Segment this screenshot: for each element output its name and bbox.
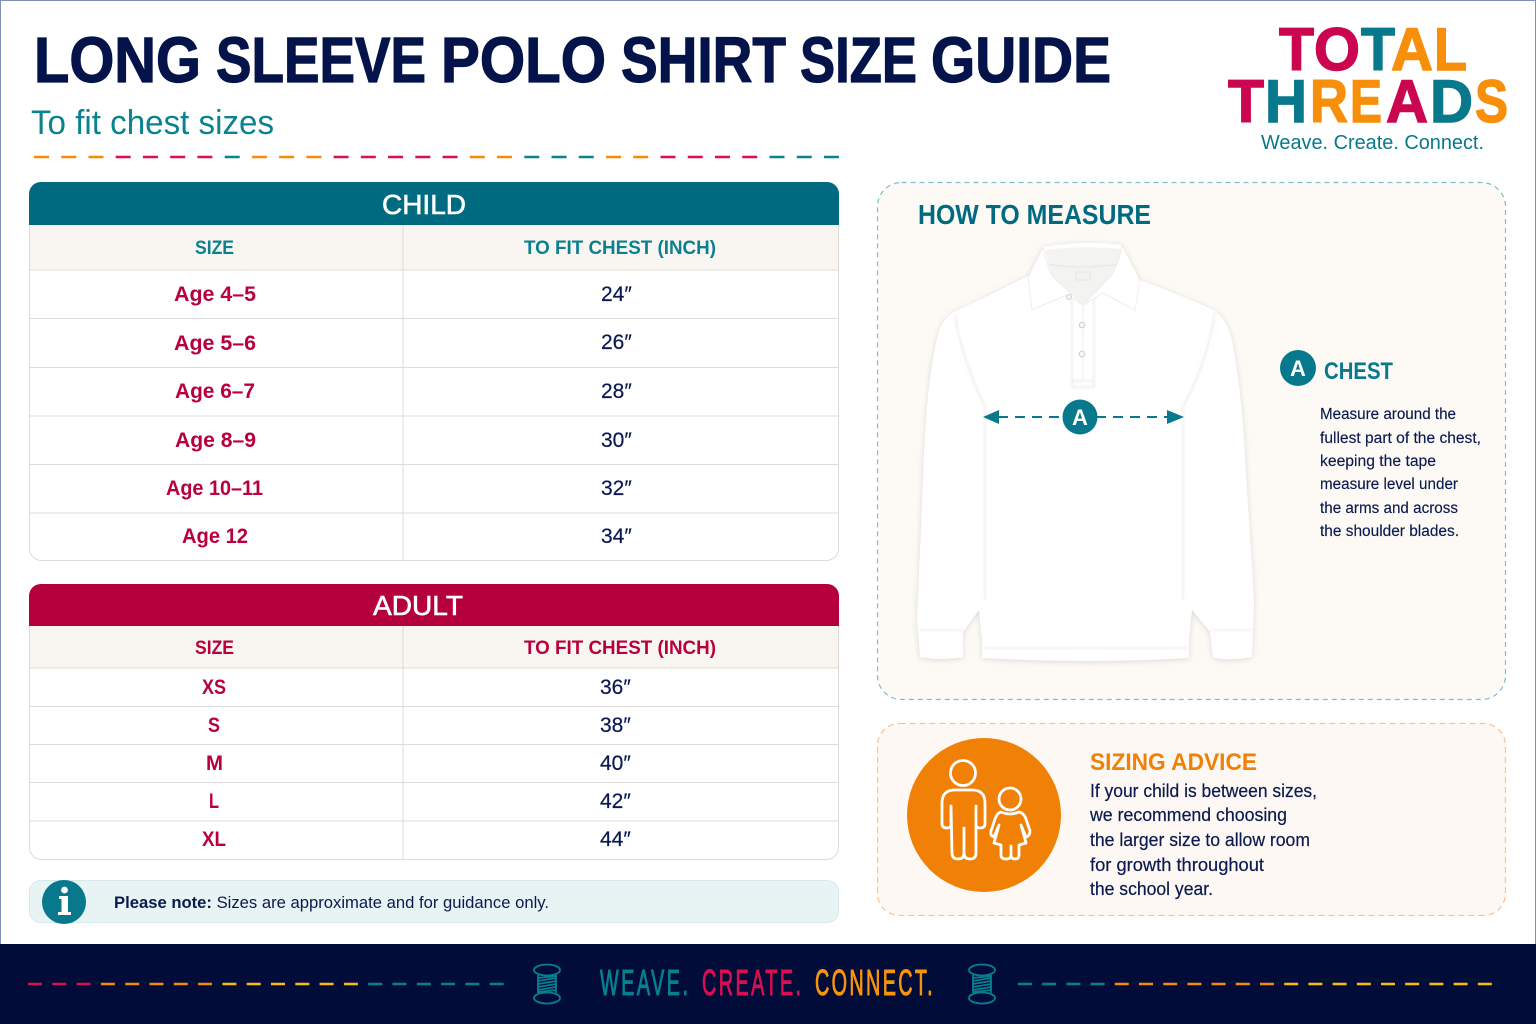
logo: O: [1314, 16, 1360, 83]
child size rows: Age 4–5: [174, 283, 256, 306]
child size rows: Age 12: [182, 525, 248, 548]
icon: info: [42, 880, 86, 924]
child size rows: Age 5–6: [174, 332, 256, 355]
logo: Weave. Create. Connect.: [1261, 132, 1484, 154]
adult size rows: 40″: [600, 752, 631, 775]
title: SIZE: [800, 24, 917, 96]
arrow: chest measurement: [983, 400, 1184, 434]
logo: A: [1386, 68, 1428, 135]
footer slogan: WEAVE.: [600, 964, 688, 1004]
title: [34, 24, 1111, 96]
column headers: [195, 238, 716, 259]
logo: T: [1279, 16, 1314, 83]
logo: L: [1434, 16, 1467, 83]
child size rows: 24″: [601, 283, 632, 306]
footer band: [0, 944, 1536, 1024]
chest instructions: measure level under: [1320, 476, 1458, 493]
child size rows: Age 10–11: [166, 477, 263, 500]
child size rows: Age 6–7: [175, 380, 255, 403]
heading: child: CHILD: [382, 189, 466, 220]
adult size rows: S: [208, 714, 220, 737]
adult size rows: XL: [202, 828, 226, 851]
panel: how to measure: [878, 182, 1506, 700]
icon: adult and child: [907, 738, 1061, 892]
logo: R: [1310, 68, 1348, 135]
advice text: If your child is between sizes,: [1090, 781, 1317, 801]
adult size rows: L: [209, 790, 219, 813]
footer slogan: CREATE.: [702, 964, 801, 1004]
adult size rows: XS: [202, 676, 226, 699]
chest label: A: [1290, 356, 1306, 381]
note bar: [30, 880, 838, 924]
chest instructions: Measure around the: [1320, 406, 1456, 423]
chest instructions: the shoulder blades.: [1320, 523, 1459, 540]
illustration: white long sleeve polo shirt: [917, 243, 1254, 661]
advice text: [1089, 781, 1317, 899]
adult size rows: 42″: [600, 790, 631, 813]
child size rows: 30″: [601, 429, 632, 452]
child size rows: 26″: [601, 331, 632, 354]
chest instructions: keeping the tape: [1320, 453, 1436, 470]
column headers: SIZE: [195, 238, 234, 259]
footer slogan: [600, 964, 933, 1004]
advice text: the larger size to allow room: [1090, 830, 1310, 850]
chest label: CHEST: [1324, 358, 1393, 385]
column headers: [195, 638, 716, 659]
left stitched line: [28, 983, 504, 985]
heading: adult: ADULT: [373, 590, 463, 621]
stitched divider: [34, 156, 839, 158]
heading: sizing advice: SIZING ADVICE: [1090, 749, 1257, 776]
arrow: chest measurement: A: [1072, 405, 1088, 430]
column headers: SIZE: [195, 638, 234, 659]
child size rows: 34″: [601, 525, 632, 548]
title: LONG: [34, 24, 201, 96]
icon: thread spool left: [534, 964, 560, 1004]
adult size rows: 36″: [600, 676, 631, 699]
logo: S: [1475, 68, 1508, 135]
subtitle: To fit chest sizes: [31, 104, 274, 142]
chest label: [1280, 350, 1393, 386]
right stitched line: [1018, 983, 1492, 985]
logo: T: [1228, 68, 1264, 135]
logo: H: [1265, 68, 1307, 135]
footer slogan: CONNECT.: [815, 964, 933, 1004]
title: SHIRT: [621, 24, 786, 96]
child size rows: 28″: [601, 380, 632, 403]
advice text: the school year.: [1090, 879, 1213, 899]
column headers: TO FIT CHEST (INCH): [524, 638, 716, 659]
logo: T: [1361, 16, 1395, 83]
child size rows: Age 8–9: [175, 429, 256, 452]
chest instructions: [1320, 406, 1481, 540]
advice text: for growth throughout: [1090, 855, 1264, 875]
icon: thread spool right: [969, 964, 995, 1004]
adult size rows: [202, 676, 631, 851]
child size rows: 32″: [601, 477, 632, 500]
chest instructions: the arms and across: [1320, 500, 1458, 517]
advice text: we recommend choosing: [1089, 805, 1287, 825]
chest instructions: fullest part of the chest,: [1320, 430, 1481, 447]
panel: sizing advice: [878, 724, 1506, 916]
note text: Please note: Sizes are approximate and for guidance only.: [114, 894, 549, 912]
adult size rows: M: [206, 752, 223, 775]
adult size rows: 38″: [600, 714, 631, 737]
panel: adult size table: [29, 584, 839, 860]
logo: E: [1350, 68, 1382, 135]
panel: child size table: [29, 182, 839, 560]
heading: how to measure: HOW TO MEASURE: [918, 199, 1151, 230]
column headers: TO FIT CHEST (INCH): [524, 238, 716, 259]
child size rows: [166, 283, 632, 548]
title: GUIDE: [931, 24, 1111, 96]
logo: A: [1391, 16, 1433, 83]
title: SLEEVE: [216, 24, 426, 96]
title: POLO: [441, 24, 606, 96]
logo: D: [1430, 68, 1473, 135]
adult size rows: 44″: [600, 828, 631, 851]
logo: [1228, 16, 1508, 154]
